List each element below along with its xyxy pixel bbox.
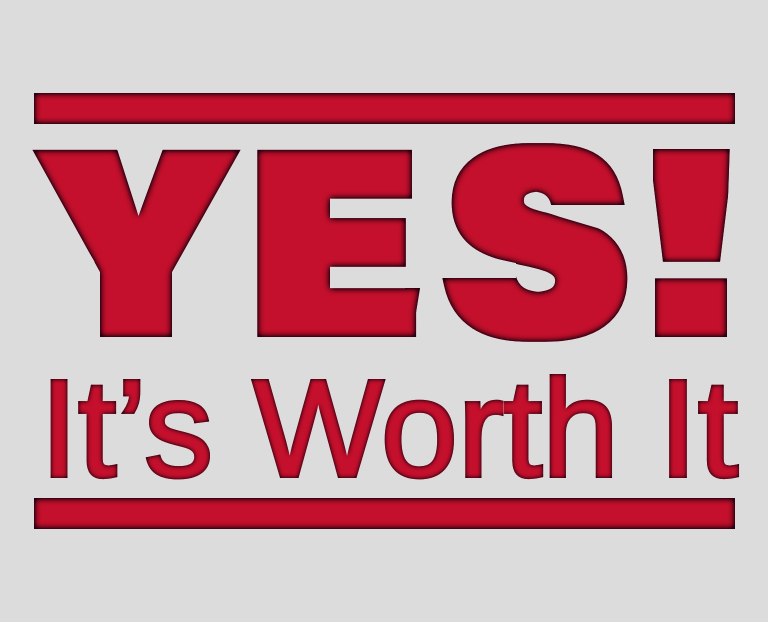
heading: YES!: S	[456, 104, 618, 382]
heading: YES!: !	[626, 5, 755, 409]
heading: YES!: Y	[56, 109, 217, 377]
top bar	[34, 93, 735, 124]
subheading: It's Worth It: It	[658, 352, 738, 506]
heading: YES!	[32, 143, 730, 342]
bottom bar	[34, 498, 735, 529]
subheading: It's Worth It	[40, 352, 738, 506]
subheading: It's Worth It: It’s	[40, 352, 213, 506]
heading: YES!: E	[265, 109, 403, 377]
subheading: It's Worth It: Worth	[253, 352, 619, 506]
